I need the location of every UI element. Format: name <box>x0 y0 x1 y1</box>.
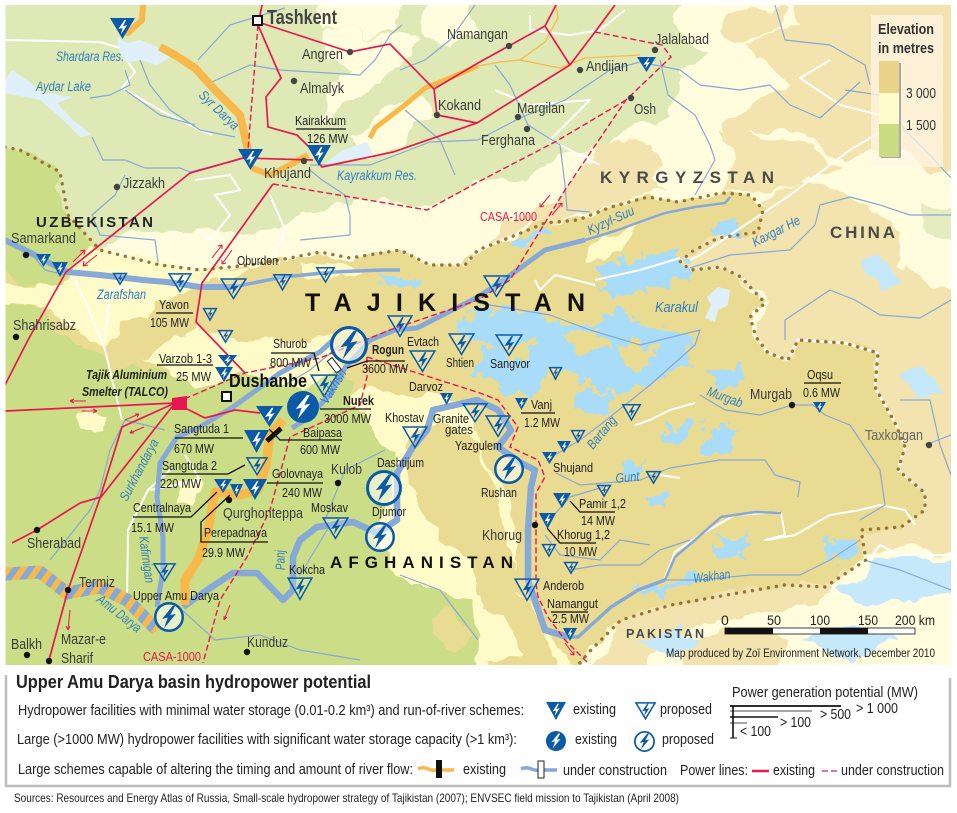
river label: Kyzyl-Suu: Kyzyl-Suu <box>585 203 637 238</box>
icons: proposed hydropower facilities <box>114 268 660 600</box>
facility label: Rushan: Rushan <box>481 486 517 500</box>
facility label: Sangtuda 1: Sangtuda 1 <box>174 422 229 436</box>
legend row: minimal storage facilities: existing <box>573 702 616 718</box>
city label: Mazar-e Sharif <box>61 631 106 667</box>
facility label: Varzob 1-3: 25 MW <box>176 370 211 384</box>
city label: Kulob: Kulob <box>331 461 362 478</box>
facility label: Namangut <box>547 597 598 626</box>
scale bar: 200 km <box>895 612 935 628</box>
facility label: Namangut: Namangut <box>547 597 598 611</box>
panel: legend <box>6 672 950 786</box>
icons: existing hydropower facilities <box>36 18 826 641</box>
icon: under-construction dam bars <box>265 358 341 443</box>
facility label: Shurob: 800 MW <box>270 356 311 370</box>
river label: Gunt: Gunt <box>615 468 641 486</box>
facility label: Golovnaya: 240 MW <box>282 486 322 500</box>
facility label: Sangtuda 1: 670 MW <box>174 442 214 456</box>
legend row: large storage facilities: proposed <box>662 732 714 748</box>
legend row: large storage facilities <box>17 731 714 751</box>
country label: Pakistan: PAKISTAN <box>626 627 704 641</box>
legend row: power lines: Power lines: <box>680 763 748 779</box>
city label: Samarkand: Samarkand <box>11 230 76 247</box>
city label: Mazar-e Sharif: Mazar-e <box>61 631 106 648</box>
facility label: Varzob 1-3: Varzob 1-3 <box>159 352 212 366</box>
facility label: Vanj: Vanj <box>531 398 552 412</box>
city label: Almalyk: Almalyk <box>300 80 344 97</box>
facility label: Evtach: Evtach <box>407 335 439 349</box>
facility label: Sangtuda 2: 220 MW <box>160 477 201 491</box>
facility label: Granite gates: gates <box>445 423 473 437</box>
facility label: Kairakkum <box>295 114 348 146</box>
legend: elevation in metres: Elevation <box>878 21 934 38</box>
city label: Tashkent: Tashkent <box>267 7 337 29</box>
facility label: Golovnaya: Golovnaya <box>272 467 323 481</box>
city label: Ferghana: Ferghana <box>481 132 536 149</box>
river label: Amu Darya: Amu Darya <box>94 591 145 636</box>
country label: China: CHINA <box>830 223 895 242</box>
label: Tajik Aluminium Smelter: Smelter (TALCO) <box>82 385 168 399</box>
city label: Angren: Angren <box>302 46 343 63</box>
legend row: river flow schemes: under construction <box>563 763 667 779</box>
facility label: Khorug 1,2: 10 MW <box>564 545 597 559</box>
city label: Namangan: Namangan <box>447 26 508 43</box>
facility label: Khostav: Khostav <box>385 411 425 425</box>
legend row: minimal storage facilities: Hydropower facilities with minimal water storage (0.01-0.2 km³) and run-of-river schemes: <box>18 703 524 719</box>
facility label: Perepadnaya: 29.9 MW <box>202 546 245 560</box>
facility label: Djumor: Djumor <box>372 505 406 519</box>
river label: Zarafshan: Zarafshan <box>96 287 146 302</box>
legend: power generation potential <box>730 685 918 740</box>
facility label: Pamir 1,2: Pamir 1,2 <box>579 497 626 511</box>
city label: Taxkorgan: Taxkorgan <box>865 427 923 444</box>
water label: Kayrakkum Res.: Kayrakkum Res. <box>337 168 417 183</box>
city label: Termiz: Termiz <box>79 574 115 591</box>
city label: Murgab: Murgab <box>750 386 792 403</box>
legend row: large storage facilities: Large (>1000 MW) hydropower facilities with significant water storage capacity (>1 km³): <box>17 732 517 748</box>
facility label: Namangut: 2.5 MW <box>552 612 589 626</box>
city label: Khorug: Khorug <box>482 527 522 544</box>
river label: Bartang: Bartang <box>584 413 620 452</box>
facility label: Sangvor: Sangvor <box>490 357 530 371</box>
legend title: Upper Amu Darya basin hydropower potential <box>16 672 371 692</box>
country label: Uzbekistan: UZBEKISTAN <box>36 214 153 231</box>
city label: Mazar-e Sharif: Sharif <box>61 650 94 667</box>
city label: Shahrisabz: Shahrisabz <box>13 317 76 334</box>
facility label: Baipasa: 600 MW <box>300 443 340 457</box>
city label: Jalalabad: Jalalabad <box>655 31 709 48</box>
legend: elevation in metres: in metres <box>878 40 934 57</box>
facility label: Yavon: 105 MW <box>150 316 189 330</box>
legend: elevation in metres: 1 500 <box>906 118 936 134</box>
facility label: Kairakkum: Kairakkum <box>295 114 346 128</box>
legend row: power lines: existing <box>773 763 815 779</box>
legend row: power lines <box>680 763 944 779</box>
legend: power generation potential: > 1 000 <box>856 701 898 717</box>
facility label: Yavon: Yavon <box>159 298 189 312</box>
facility label: Oqsu: Oqsu <box>807 368 833 382</box>
facility label: Vanj <box>521 398 560 430</box>
label: Tajik Aluminium Smelter: Tajik Aluminium <box>86 368 167 382</box>
facility label: Golovnaya <box>267 467 323 500</box>
legend: power generation potential: > 100 <box>780 715 811 731</box>
legend row: river flow schemes <box>18 760 667 779</box>
water label: Shardara Res.: Shardara Res. <box>56 49 124 64</box>
facility label: Oqsu: 0.6 MW <box>803 386 840 400</box>
facility label: Rogun <box>347 343 408 376</box>
legend row: river flow schemes: existing <box>463 762 506 778</box>
legend row: river flow schemes: Large schemes capable of altering the timing and amount of river flow: <box>18 762 413 778</box>
icons: large hydropower facilities <box>155 328 523 631</box>
legend: power generation potential: < 100 <box>740 724 771 740</box>
facility label: Pamir 1,2: 14 MW <box>581 514 615 528</box>
city label: Sherabad: Sherabad <box>27 535 81 552</box>
country label: Afghanistan: AFGHANISTAN <box>330 553 513 572</box>
facility label: Granite gates: Granite <box>433 412 469 426</box>
scale bar: 0 <box>721 612 729 628</box>
facility label: Centralnaya <box>131 492 217 535</box>
legend row: large storage facilities: existing <box>575 732 617 748</box>
facility label: Perepadnaya: Perepadnaya <box>204 526 267 540</box>
facility label: Rogun: 3600 MW <box>362 362 408 376</box>
city label: Khujand: Khujand <box>264 165 311 182</box>
facility label: Kokcha: Kokcha <box>289 563 325 577</box>
facility label: Dashtijum: Dashtijum <box>377 456 424 470</box>
facility label: Yavon <box>150 298 193 330</box>
label: Tajik Aluminium Smelter <box>82 368 168 399</box>
city label: Balkh: Balkh <box>11 636 42 653</box>
facility label: Oqsu <box>803 368 841 400</box>
lake label: Karakul: Karakul <box>655 299 699 316</box>
facility label: Granite gates <box>433 412 473 437</box>
facility label: Upper Amu Darya: Upper Amu Darya <box>133 589 219 603</box>
facility label: Centralnaya: 15.1 MW <box>131 521 174 535</box>
facility label: Yazgulem: Yazgulem <box>455 439 502 453</box>
facility label: Sangtuda 2: Sangtuda 2 <box>162 459 217 473</box>
facility label: Khorug 1,2: Khorug 1,2 <box>557 528 610 542</box>
facility label: Rogun: Rogun <box>372 343 404 357</box>
facility label: Pamir 1,2 <box>570 497 626 528</box>
legend row: power lines: under construction <box>841 763 944 779</box>
facility label: Perepadnaya <box>201 495 268 560</box>
river label: Murgab: Murgab <box>705 384 745 411</box>
country label: Kyrgyzstan: KYRGYZSTAN <box>600 168 774 187</box>
scale bar <box>721 612 935 634</box>
place label: Oburdon: Oburdon <box>237 254 278 268</box>
river label: Kafirnigan: Kafirnigan <box>136 535 157 584</box>
legend: power generation potential: > 500 <box>820 707 851 723</box>
facility label: Darvoz: Darvoz <box>409 380 443 394</box>
scale bar: 100 <box>810 612 830 628</box>
facility label: Kairakkum: 126 MW <box>307 132 348 146</box>
river label: Vakhsh: Vakhsh <box>317 366 350 407</box>
river label: Syr Darya: Syr Darya <box>196 87 243 133</box>
city label: Qurghonteppa: Qurghonteppa <box>223 505 304 522</box>
facility label: Shurob <box>270 337 319 371</box>
legend: elevation in metres <box>871 15 943 167</box>
facility label: Nurek <box>320 394 374 426</box>
city label: Kunduz: Kunduz <box>247 634 288 651</box>
scale bar: 50 <box>767 612 781 628</box>
legend: elevation in metres: 3 000 <box>906 86 936 102</box>
facility label: Shurob: Shurob <box>273 337 307 351</box>
facility label: Varzob 1-3 <box>157 352 213 384</box>
facility label: Nurek: 3000 MW <box>324 412 371 426</box>
city label: Osh: Osh <box>634 101 656 118</box>
facility label: Centralnaya: Centralnaya <box>133 501 191 515</box>
facility label: Baipasa: Baipasa <box>303 426 342 440</box>
scale bar: 150 <box>858 612 878 628</box>
legend row: minimal storage facilities: proposed <box>660 702 712 718</box>
facility label: Moskav: Moskav <box>311 501 349 515</box>
city label: Andijan: Andijan <box>586 58 628 75</box>
facility label: Nurek: Nurek <box>343 394 374 408</box>
power line label: CASA-1000 south: CASA-1000 <box>143 650 201 664</box>
river label: Surkhandarya: Surkhandarya <box>116 436 162 503</box>
capital label: Dushanbe: Dushanbe <box>229 371 307 391</box>
facility label: Shtien: Shtien <box>446 356 474 370</box>
city label: Jizzakh: Jizzakh <box>123 175 165 192</box>
facility label: Baipasa <box>269 426 342 457</box>
country label: Tajikistan: TAJIKISTAN <box>305 289 585 317</box>
water label: Aydar Lake: Aydar Lake <box>35 79 91 94</box>
river label: Kaxgar He: Kaxgar He <box>750 213 803 250</box>
power line label: CASA-1000 north: CASA-1000 <box>480 210 537 224</box>
facility label: Vanj: 1.2 MW <box>524 416 560 430</box>
sources: Sources: Resources and Energy Atlas of Russia, Small-scale hydropower strategy of Tajikistan (2007); ENVSEC field mission to Tajikistan (April 2008) <box>14 791 679 805</box>
legend: power generation potential: Power generation potential (MW) <box>732 685 918 701</box>
city label: Margilan: Margilan <box>517 100 565 117</box>
river label: Panj: Panj <box>272 549 288 570</box>
river label: Wakhan: Wakhan <box>693 567 731 586</box>
facility label: Anderob: Anderob <box>543 579 584 593</box>
facility label: Khorug 1,2 <box>547 528 610 559</box>
facility label: Sangtuda 2 <box>160 459 245 491</box>
facility label: Shujand: Shujand <box>553 461 593 475</box>
city label: Kokand: Kokand <box>438 97 481 114</box>
capital and city markers <box>13 16 932 664</box>
facility label: Sangtuda 1 <box>174 422 243 456</box>
